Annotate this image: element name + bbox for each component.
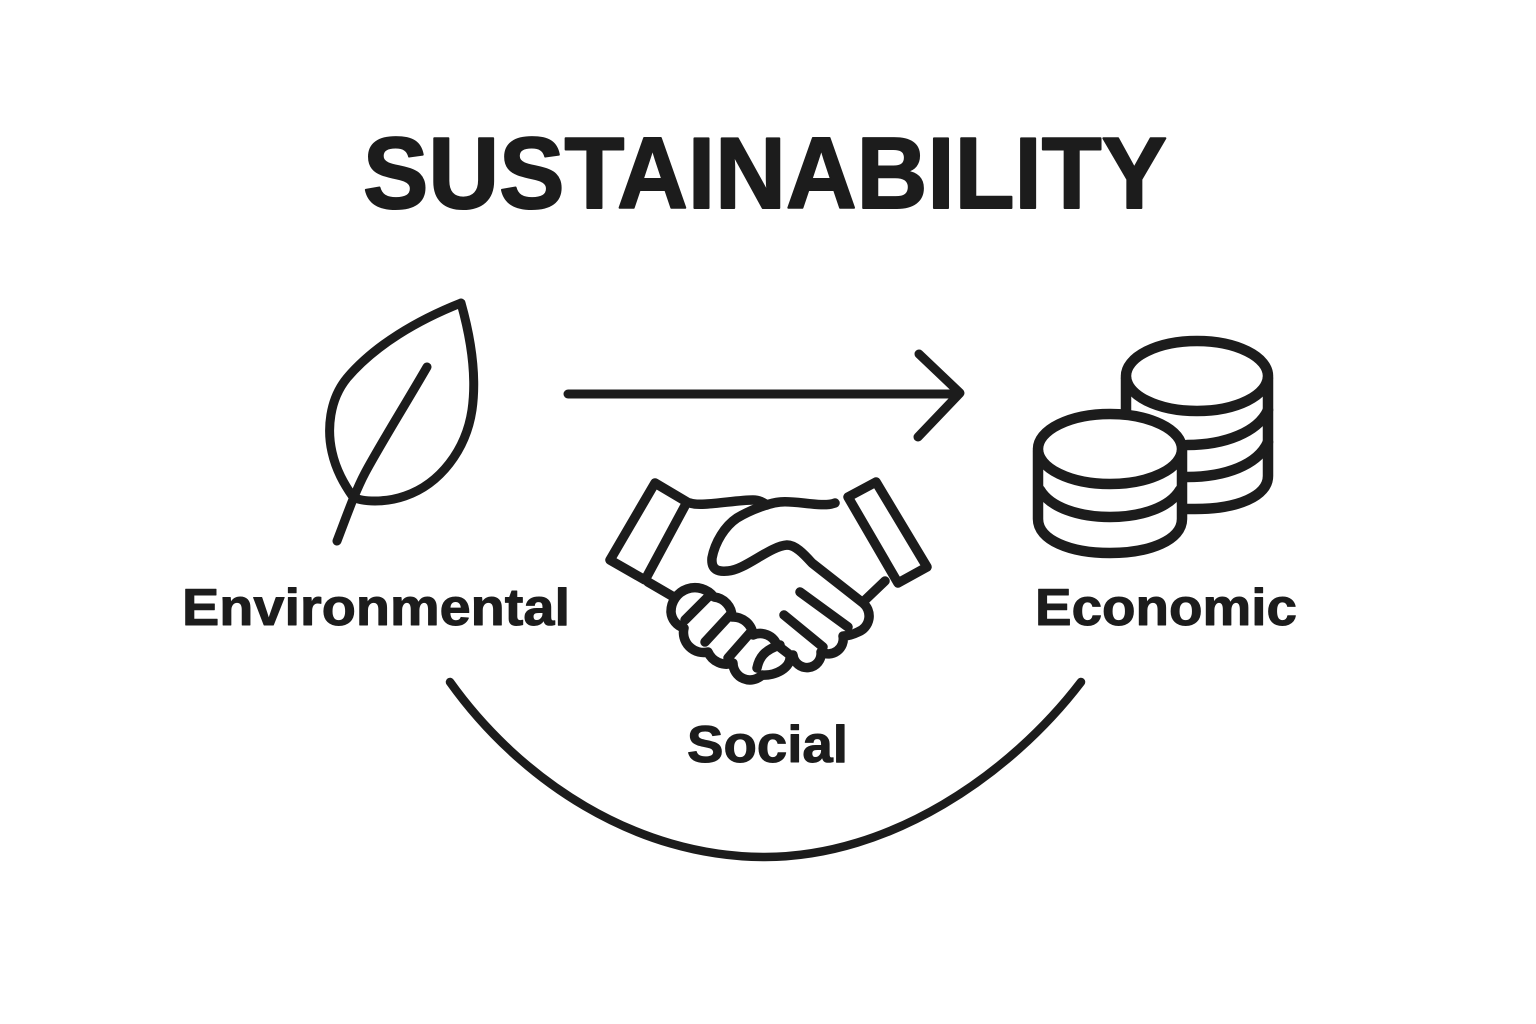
arrow: environmental to economic bbox=[568, 354, 960, 437]
icon: handshake bbox=[610, 482, 927, 680]
icon: coins bbox=[1038, 341, 1268, 553]
label: Social: Social bbox=[687, 716, 848, 774]
bottom arc bbox=[450, 682, 1081, 857]
title: SUSTAINABILITY bbox=[363, 118, 1167, 230]
label: Environmental: Environmental bbox=[182, 579, 570, 637]
right hand fingers bbox=[784, 592, 848, 647]
right hand thumb and back bbox=[712, 502, 869, 668]
left hand knuckles bbox=[671, 588, 790, 680]
label: Economic: Economic bbox=[1035, 579, 1297, 637]
right cuff bbox=[848, 482, 927, 583]
right wrist bbox=[863, 581, 885, 602]
left wrist bbox=[648, 582, 672, 596]
front coin stack bbox=[1038, 414, 1182, 553]
top of left hand bbox=[690, 500, 767, 505]
back coin stack bbox=[1126, 341, 1268, 509]
icon: leaf bbox=[330, 303, 474, 541]
left cuff bbox=[610, 483, 687, 580]
